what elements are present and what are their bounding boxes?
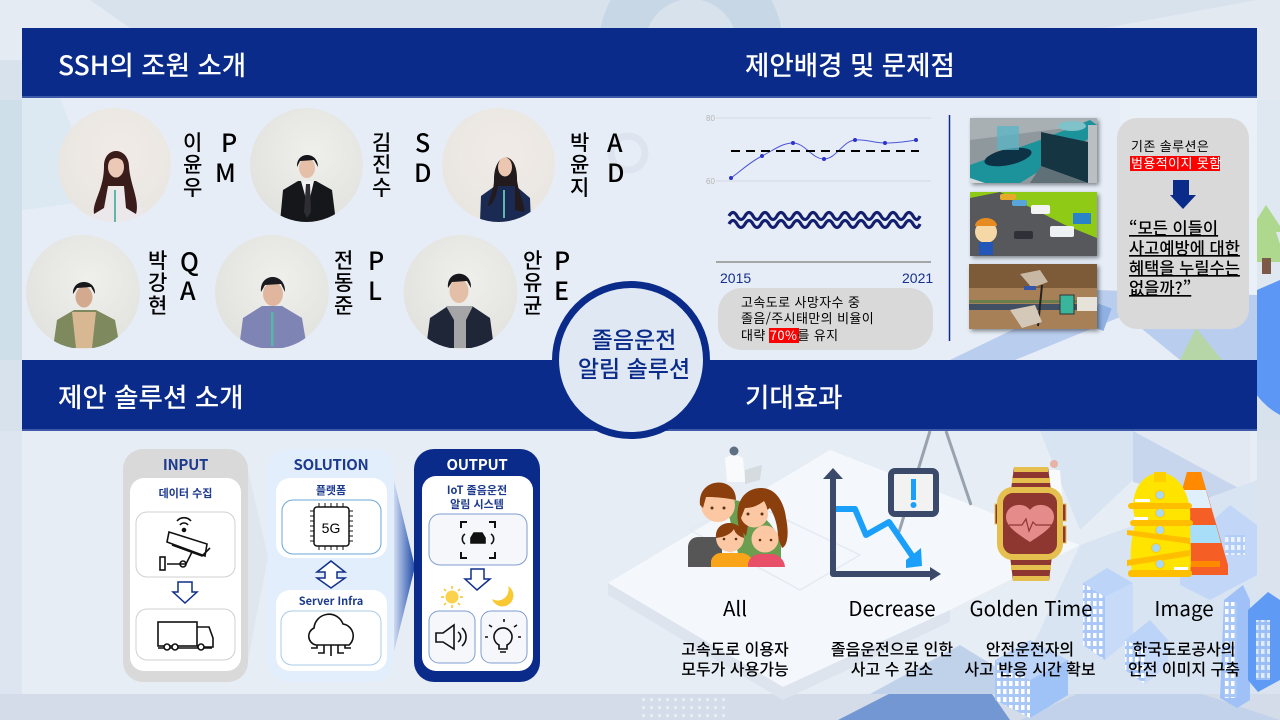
panel: output: OUTPUT [447, 454, 507, 475]
icon: light bulb [485, 619, 521, 652]
callout: fatality ratio: 졸음/주시태만의 비율이 [741, 308, 874, 327]
member label: 전동준 PL [334, 242, 384, 320]
panel: input [123, 449, 268, 682]
effect: All: All [723, 592, 747, 622]
building [1220, 585, 1250, 708]
heading: expected effects: 기대효과 [745, 376, 843, 415]
icon: 5G chip: 5G [322, 520, 340, 536]
line chart: drowsy driving share 2015-2021: 80 [706, 114, 715, 123]
member photo: 이윤우 [58, 108, 171, 222]
panel: output: 알림 시스템 [450, 496, 504, 512]
effect: Golden Time: 안전운전자의 [986, 636, 1074, 660]
member photo: 전동준 [215, 235, 329, 349]
member label: 박윤지 AD: 박 [570, 127, 589, 157]
icon: helmets and traffic cone [1127, 472, 1228, 577]
photo: tunnel warning device [969, 264, 1097, 329]
member label: 전동준 PL: L [368, 272, 382, 308]
panel: solution: SOLUTION [294, 454, 368, 475]
member label: 박윤지 AD [570, 124, 624, 202]
effect: Golden Time: 사고 반응 시간 확보 [964, 656, 1096, 680]
member label: 박강현 QA: 강 [148, 267, 167, 297]
isometric board and city illustration [608, 431, 1280, 718]
effect: Decrease: 사고 수 감소 [851, 656, 933, 680]
icon: family [688, 483, 788, 567]
line chart: drowsy driving share 2015-2021: 60 [706, 177, 715, 186]
content panel backdrop [22, 98, 1257, 694]
arrow: input down [173, 582, 197, 603]
member photo: 안유균 [404, 235, 518, 349]
icon: smart watch [995, 467, 1066, 581]
panel: team members [26, 108, 624, 349]
panel: solution: Server Infra [299, 593, 363, 609]
member label: 박강현 QA: 박 [148, 245, 167, 275]
member label: 안유균 PE: E [554, 272, 569, 308]
icon: cloud [309, 614, 353, 656]
center badge: 알림 솔루션 [578, 350, 690, 384]
member label: 박윤지 AD: 지 [570, 172, 589, 202]
effect: Image: Image [1154, 592, 1214, 622]
member label: 김진수 SD [372, 124, 431, 202]
callout: existing solution limitation: “모든 이들이 [1129, 215, 1218, 239]
member label: 안유균 PE: 안 [523, 245, 542, 275]
figure: worker [1049, 460, 1063, 510]
icon: moon [492, 586, 513, 606]
effect: Golden Time [964, 592, 1096, 680]
effect: Decrease: 졸음운전으로 인한 [831, 636, 953, 660]
member label: 박강현 QA: Q [180, 243, 199, 279]
arrow: down [1170, 180, 1196, 209]
header bar: top [22, 28, 1257, 98]
panel: input: 데이터 수집 [159, 485, 212, 501]
callout: existing solution limitation: 혜택을 누릴수는 [1129, 255, 1240, 279]
effect: Golden Time: Golden Time [970, 592, 1092, 622]
effect: Image: 한국도로공사의 [1132, 636, 1236, 660]
effect: Image: 안전 이미지 구축 [1128, 656, 1240, 680]
photo: highway cartoon [970, 192, 1097, 256]
member label: 박윤지 AD: A [607, 124, 623, 160]
line chart: drowsy driving share 2015-2021: 2015 [720, 270, 751, 286]
member label: 이윤우 PM: M [215, 154, 236, 190]
line chart: drowsy driving share 2015-2021: 2021 [902, 270, 933, 286]
effect: All [681, 592, 789, 680]
panel: solution: 플랫폼 [316, 482, 346, 498]
arrow: two-way [317, 561, 345, 588]
member label: 박강현 QA: A [180, 272, 196, 308]
line chart: drowsy driving share 2015-2021 [706, 114, 933, 286]
member label: 전동준 PL: 동 [334, 267, 353, 297]
building [1125, 620, 1168, 684]
photo: smart highway illustration [970, 118, 1097, 183]
member label: 이윤우 PM: 윤 [183, 149, 202, 179]
callout: fatality ratio: 대략 70%를 유지 [741, 325, 838, 344]
member label: 박윤지 AD: 윤 [570, 149, 589, 179]
member label: 박강현 QA [148, 243, 199, 320]
member label: 전동준 PL: 준 [334, 290, 353, 320]
panel: output: IoT 졸음운전 [447, 482, 507, 498]
heading: team introduction: SSH의 조원 소개 [58, 44, 246, 83]
heading: background and problems: 제안배경 및 문제점 [745, 44, 955, 83]
icon: sun [441, 586, 463, 608]
member label: 이윤우 PM [183, 124, 237, 202]
callout: existing solution limitation: 기존 솔루션은 [1131, 136, 1209, 155]
member label: 이윤우 PM: 이 [183, 127, 202, 157]
member label: 박윤지 AD: D [607, 154, 624, 190]
icon: 5G chip [310, 503, 353, 550]
member label: 전동준 PL: 전 [334, 245, 353, 275]
effect: Decrease [831, 592, 953, 680]
callout: existing solution limitation: 없을까?” [1129, 275, 1191, 299]
member label: 박강현 QA: 현 [148, 290, 167, 320]
icon: cctv camera [160, 518, 210, 570]
divider line [948, 115, 950, 341]
center badge [556, 284, 706, 436]
arrow: output down [465, 569, 490, 590]
callout: existing solution limitation: 사고예방에 대한 [1129, 235, 1240, 259]
member label: 김진수 SD: 진 [372, 149, 391, 179]
member photo: 박윤지 [442, 108, 555, 222]
member label: 안유균 PE [523, 242, 570, 320]
callout: fatality ratio [718, 288, 933, 350]
member label: 이윤우 PM: P [221, 124, 237, 160]
callout: existing solution limitation [1117, 118, 1249, 329]
header bar: middle [22, 360, 1257, 431]
figure: man with laptop [725, 446, 762, 484]
member label: 안유균 PE: P [554, 242, 570, 278]
callout: existing solution limitation: 범용적이지 못함 [1131, 153, 1222, 172]
icon: car scan [461, 522, 495, 558]
member photo: 김진수 [250, 108, 363, 222]
center badge: 졸음운전 [592, 321, 676, 355]
effect: Decrease: Decrease [848, 592, 936, 622]
panel: input: INPUT [163, 454, 208, 475]
building [1083, 568, 1133, 660]
callout: fatality ratio: 고속도로 사망자수 중 [741, 292, 860, 311]
member photo: 박강현 [26, 235, 140, 349]
member label: 김진수 SD: 수 [372, 172, 391, 202]
icon: decreasing chart [823, 468, 941, 581]
member label: 김진수 SD: 김 [372, 127, 391, 157]
icon: speaker [436, 625, 466, 649]
member label: 안유균 PE: 균 [523, 290, 542, 320]
member label: 김진수 SD: D [414, 154, 431, 190]
building [1248, 592, 1280, 692]
panel: output [414, 449, 540, 682]
heading: solution introduction: 제안 솔루션 소개 [58, 376, 244, 415]
member label: 안유균 PE: 유 [523, 267, 542, 297]
building [995, 640, 1068, 718]
panel: solution [268, 449, 415, 682]
member label: 전동준 PL: P [368, 242, 384, 278]
icon: truck [158, 622, 213, 650]
member label: 이윤우 PM: 우 [183, 172, 202, 202]
effect: All: 고속도로 이용자 [681, 636, 789, 660]
effect: Image [1128, 592, 1240, 680]
effect: All: 모두가 사용가능 [681, 656, 789, 680]
icon: tree right edge [1249, 205, 1280, 274]
member label: 김진수 SD: S [415, 124, 430, 160]
